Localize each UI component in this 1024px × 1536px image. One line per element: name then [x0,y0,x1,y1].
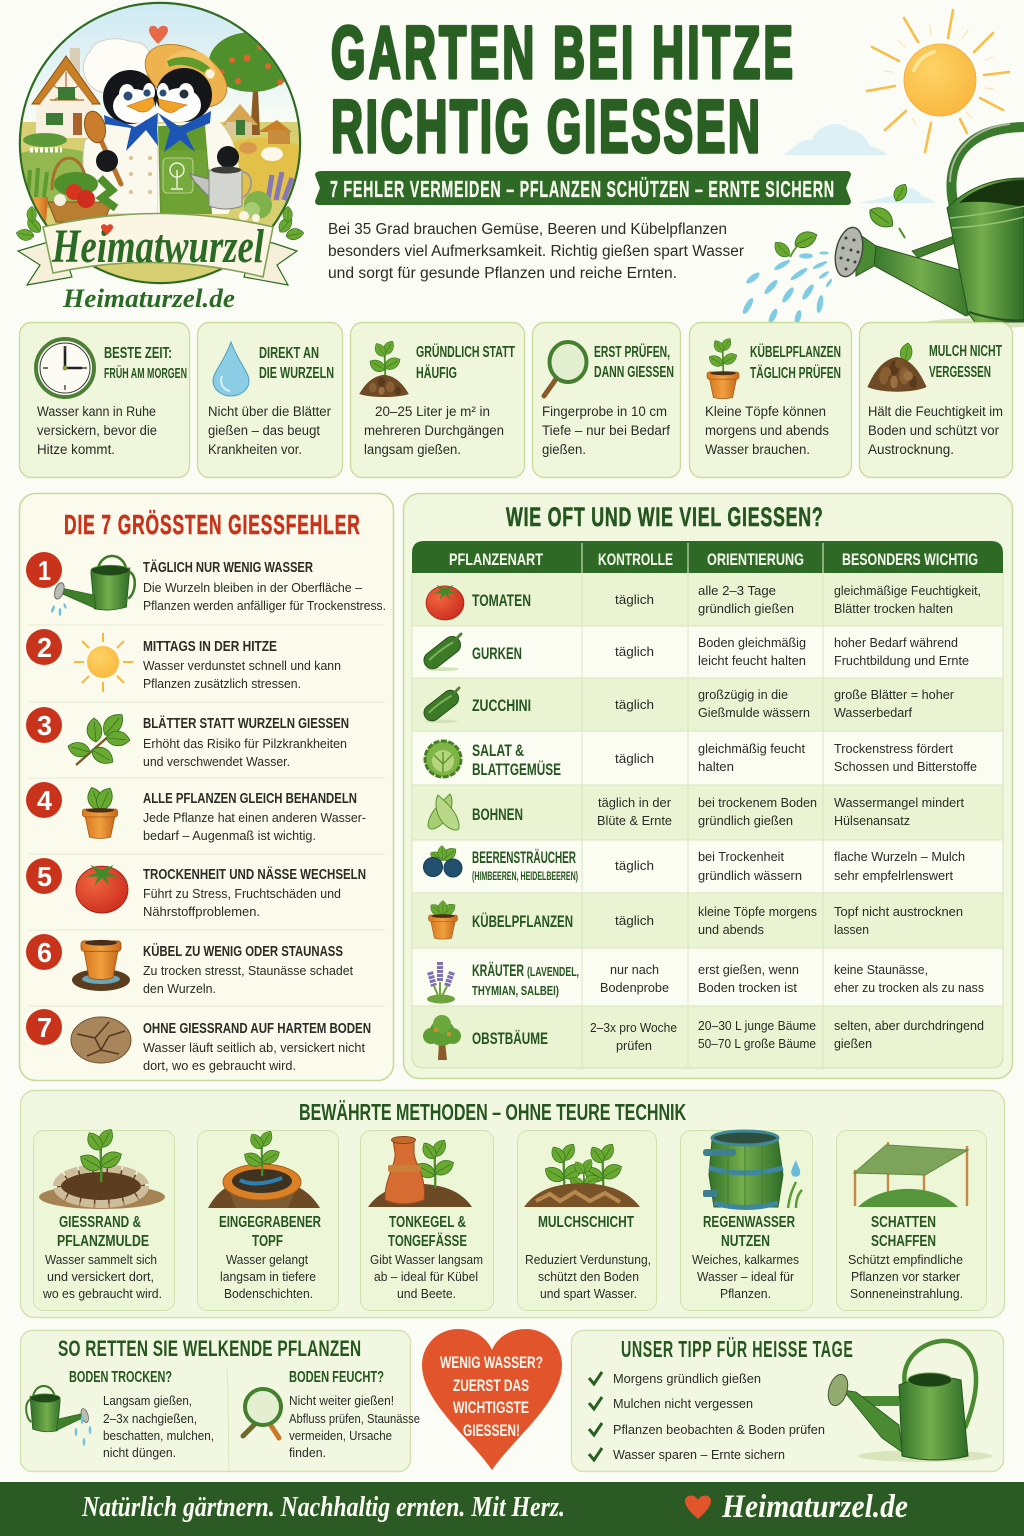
method: Gießrand: wo es gebraucht wird. [42,1287,162,1301]
checklist: Wasser sparen – Ernte sichern [613,1447,785,1462]
row: Salat und Blattgemüse: gleichmäßig feucht [698,741,805,756]
checklist: Morgens gründlich gießen [613,1371,761,1386]
card text: Fingerprobe in 10 cm [542,404,667,419]
card text: langsam gießen. [364,442,461,457]
row: Beerensträucher: bei Trockenheit [698,849,784,864]
row: Tomaten: Blätter trocken halten [834,601,953,616]
card text: Wasser kann in Ruhe [37,404,156,419]
row: Kräuter [427,961,984,1004]
icon: mulch pile [867,342,927,392]
item 7: Wasser läuft seitlich ab, versickert nicht [143,1041,366,1055]
row: Kübelpflanzen: täglich [615,913,654,928]
heading: UNSER TIPP FÜR HEISSE TAGE [621,1338,853,1363]
method: Eingegrabener Topf: EINGEGRABENER [219,1214,321,1231]
item 5: Führt zu Stress, Fruchtschäden und [143,887,341,901]
item 5: 5 [37,861,52,892]
row: Beerensträucher: täglich [615,858,654,873]
row: Obstbäume: 50–70 L große Bäume [698,1036,816,1051]
method: Gießrand: PFLANZMULDE [57,1233,149,1250]
method: Mulchschicht: und spart Wasser. [540,1287,637,1301]
item 4 [26,782,366,843]
icon: potted plant [707,336,739,399]
column: Boden trocken: beschatten, mulchen, [103,1429,214,1443]
item 4: Jede Pflanze hat einen anderen Wasser- [143,811,366,825]
icon: large watering can [831,124,1024,328]
icon: seedling on soil [359,339,409,397]
method: Mulchschicht: schützt den Boden [538,1270,639,1284]
item 2: Pflanzen zusätzlich stressen. [143,677,301,691]
method: Gießrand [34,1126,174,1310]
ribbon banner with brand name [18,214,297,285]
item 5: Nährstoffproblemen. [143,905,260,919]
card text: Nicht über die Blätter [208,404,331,419]
method: Gießrand: und versickert dort, [47,1270,154,1284]
row: Obstbäume: gießen [834,1036,872,1051]
method: Schatten: Sonneneinstrahlung. [850,1287,963,1301]
panel: Kübelpflanzen täglich prüfen [690,322,852,478]
row: Kräuter: KRÄUTER [472,961,524,980]
table header: BESONDERS WICHTIG [842,550,978,569]
callout: heart: WENIG WASSER? [440,1354,543,1372]
method: Regenwasser: REGENWASSER [703,1214,795,1231]
title: GARTEN BEI HITZE [331,11,793,94]
item 4: 4 [37,785,52,816]
table [412,541,1003,1068]
icon: floating leaves [771,181,910,260]
item 7: OHNE GIESSRAND AUF HARTEM BODEN [143,1021,371,1037]
item 3: und verschwendet Wasser. [143,755,290,769]
card text [208,404,331,457]
item 1 [26,552,386,616]
card text [364,404,504,457]
panel: Mulch nicht vergessen [860,322,1012,478]
callout: heart: GIESSEN! [463,1422,520,1440]
illustration: half-timbered house [23,48,100,150]
checklist: Pflanzen beobachten & Boden prüfen [613,1422,825,1437]
row: Tomaten: TOMATEN [472,591,531,610]
row: Bohnen: Blüte & Ernte [597,813,672,828]
checklist [589,1371,825,1462]
item 6: den Wurzeln. [143,982,216,996]
column: Boden feucht: BODEN FEUCHT? [289,1369,384,1386]
heading: BEWÄHRTE METHODEN – OHNE TEURE TECHNIK [299,1099,687,1126]
method: Regenwasser: NUTZEN [721,1233,770,1250]
method: Schatten: SCHAFFEN [871,1233,936,1250]
row: Obstbäume: OBSTBÄUME [472,1029,548,1048]
footer bar: Natürlich gärtnern. Nachhaltig ernten. Mit Herz. [81,1491,565,1523]
row: Tomaten: gleichmäßige Feuchtigkeit, [834,583,981,598]
row: Kübelpflanzen: Topf nicht austrocknen [834,904,963,919]
icon: heart above penguins [149,26,168,44]
card text: gießen. [542,442,586,457]
banner: subtitle: 7 FEHLER VERMEIDEN – PFLANZEN SCHÜTZEN – ERNTE SICHERN [330,178,834,203]
item 1: Die Wurzeln bleiben in der Oberfläche – [143,581,362,595]
title: RICHTIG GIESSEN [331,85,760,168]
column: Boden feucht: finden. [289,1446,326,1460]
row: Beerensträucher: sehr empfelrlenswert [834,868,953,883]
icon: magnifying glass [544,342,586,396]
row: Zucchini: Wasserbedarf [834,705,912,720]
row: Gurken [421,633,969,672]
method: Tonkegel: Gibt Wasser langsam [370,1253,483,1267]
callout: heart: WICHTIGSTE [453,1399,529,1417]
title [331,11,793,168]
row: Bohnen: täglich in der [598,795,672,810]
row: Kräuter: erst gießen, wenn [698,962,799,977]
callout: heart: ZUERST DAS [453,1377,529,1395]
method: Tonkegel: TONGEFÄSSE [388,1232,467,1250]
illustration: vegetable basket and herbs [27,156,118,222]
row: Gurken: täglich [615,644,654,659]
item 5 [26,858,366,919]
method: Mulchschicht [518,1130,656,1310]
method: Eingegrabener Topf: Wasser gelangt [226,1253,308,1267]
row: Kräuter: nur nach [610,962,659,977]
row: Kräuter: (LAVENDEL, [527,965,579,979]
logo: Heimatwurzel penguin gardeners badge [16,2,304,308]
row: Kübelpflanzen: kleine Töpfe morgens [698,904,817,919]
item 5: TROCKENHEIT UND NÄSSE WECHSELN [143,866,366,883]
row: Bohnen: Wassermangel mindert [834,795,964,810]
item 7: dort, wo es gebraucht wird. [143,1059,296,1073]
row: Bohnen: gründlich gießen [698,813,793,828]
card heading [929,343,1002,381]
column: Boden trocken [26,1369,214,1460]
table header: ORIENTIERUNG [707,550,804,569]
row: Beerensträucher: (HIMBEEREN, HEIDELBEEREN) [472,871,578,883]
card text [868,404,1003,457]
item 4: ALLE PFLANZEN GLEICH BEHANDELN [143,791,357,807]
icon: watering can [825,1341,992,1462]
row: Beerensträucher [424,845,965,883]
panel: Unser Tipp für heiße Tage [572,1330,1004,1472]
row: Salat und Blattgemüse: BLATTGEMÜSE [472,760,561,779]
row: Zucchini: große Blätter = hoher [834,687,955,702]
ribbon banner with brand name: Heimatwurzel [51,220,265,273]
item 7: 7 [37,1012,52,1043]
method: Gießrand: Wasser sammelt sich [45,1253,157,1267]
column: Boden trocken: Langsam gießen, [103,1394,192,1408]
icon: water drop [213,342,249,396]
card heading: BESTE ZEIT: [104,345,172,362]
row: Salat und Blattgemüse: Schossen und Bitterstoffe [834,759,977,774]
row: Salat und Blattgemüse: täglich [615,751,654,766]
row: Obstbäume [423,1015,984,1060]
card text: 20–25 Liter je m² in [375,404,490,419]
row: Salat und Blattgemüse: Trockenstress fördert [834,741,953,756]
illustration: apple tree and barn [209,32,295,161]
card heading [259,345,334,382]
row: Tomaten: täglich [615,592,654,607]
card text [37,404,157,457]
laurel leaves [15,206,305,242]
method: Schatten: SCHATTEN [871,1214,936,1231]
card text [542,404,670,457]
card heading [750,342,841,382]
illustration: lavender and cabbage [239,172,292,222]
card text: Wasser brauchen. [705,442,810,457]
row: Gurken: hoher Bedarf während [834,635,958,650]
card text: Boden und schützt vor [868,423,999,438]
row: Beerensträucher: flache Wurzeln – Mulch [834,849,965,864]
card heading: FRÜH AM MORGEN [104,365,187,382]
method: Mulchschicht: Reduziert Verdunstung, [525,1253,651,1267]
method: Schatten: Pflanzen vor starker [851,1270,960,1284]
item 6: 6 [37,937,52,968]
card text: Hitze kommt. [37,442,115,457]
item 1: Pflanzen werden anfälliger für Trockenstress. [143,599,386,613]
intro text [328,221,744,282]
row: Salat und Blattgemüse: halten [698,759,734,774]
icon: sun [867,10,1009,152]
panel: Wie oft und wie viel gießen [404,494,1012,1078]
item 6 [26,934,354,996]
method: Tonkegel: und Beete. [397,1287,456,1301]
card heading: HÄUFIG [416,364,457,382]
panel: Erst prüfen, dann gießen [532,322,680,478]
item 4: bedarf – Augenmaß ist wichtig. [143,829,316,843]
table header: KONTROLLE [598,550,673,569]
row: Tomaten: alle 2–3 Tage [698,583,776,598]
card text [705,404,829,457]
row: Tomaten: gründlich gießen [698,601,794,616]
method: Regenwasser: Wasser – ideal für [697,1270,794,1284]
item 6: Zu trocken stresst, Staunässe schadet [143,964,354,978]
item 3: BLÄTTER STATT WURZELN GIESSEN [143,715,349,732]
method: Tonkegel: TONKEGEL & [389,1214,466,1231]
card heading: DIE WURZELN [259,365,334,382]
method: Gießrand: GIESSRAND & [59,1214,141,1231]
row: Gurken: Fruchtbildung und Ernte [834,653,969,668]
method: Tonkegel [360,1130,494,1310]
card heading [104,345,187,382]
card text: versickern, bevor die [37,423,157,438]
card heading [416,342,515,382]
icon: water spray drops [741,252,833,325]
heading: SO RETTEN SIE WELKENDE PFLANZEN [58,1337,361,1362]
row: Bohnen: BOHNEN [472,805,523,824]
panel: Bewährte Methoden [20,1090,1004,1318]
row: Obstbäume: 2–3x pro Woche [590,1020,677,1035]
column: Boden trocken: 2–3x nachgießen, [103,1412,197,1426]
column: Boden trocken: nicht düngen. [103,1446,176,1460]
panel: Direkt an die Wurzeln [198,322,342,478]
icon: heart [685,1496,711,1519]
intro text: besonders viel Aufmerksamkeit. Richtig gießen spart Wasser [328,243,744,260]
row: Bohnen: bei trockenem Boden [698,795,817,810]
card text: gießen – das beugt [208,423,320,438]
item 2: 2 [37,632,52,663]
row: Obstbäume: prüfen [616,1038,652,1053]
row: Kübelpflanzen: lassen [834,922,869,937]
card heading: ERST PRÜFEN, [594,342,670,361]
card text: Hält die Feuchtigkeit im [868,404,1003,419]
item 6: KÜBEL ZU WENIG ODER STAUNASS [143,943,343,960]
row: Zucchini: großzügig in die [698,687,788,702]
illustration: gardener penguin with straw hat [144,44,252,214]
footer bar: Heimaturzel.de [721,1489,908,1525]
item 1: 1 [38,555,51,586]
row: Kübelpflanzen: KÜBELPFLANZEN [472,912,573,931]
method: Mulchschicht: MULCHSCHICHT [538,1214,634,1231]
card text: mehreren Durchgängen [364,423,504,438]
row: Bohnen [428,794,964,830]
card heading: GRÜNDLICH STATT [416,342,515,361]
heading: DIE 7 GRÖSSTEN GIESSFEHLER [64,509,360,540]
row: Beerensträucher: BEERENSTRÄUCHER [472,848,576,867]
heading: WIE OFT UND WIE VIEL GIESSEN? [506,501,823,532]
row: Kräuter: Bodenprobe [600,980,669,995]
card text: Krankheiten vor. [208,442,302,457]
card text: Austrocknung. [868,442,954,457]
column: Boden feucht [243,1369,420,1460]
column: Boden feucht: Nicht weiter gießen! [289,1394,394,1408]
card text: Kleine Töpfe können [705,404,826,419]
row: Salat und Blattgemüse [425,741,977,779]
row: Beerensträucher: gründlich wässern [698,868,802,883]
row: Obstbäume: 20–30 L junge Bäume [698,1018,816,1033]
card text: Tiefe – nur bei Bedarf [542,423,670,438]
row: Kräuter: THYMIAN, SALBEI) [472,983,559,998]
row: Zucchini: Gießmulde wässern [698,705,810,720]
row: Obstbäume: selten, aber durchdringend [834,1018,984,1033]
column: Boden trocken: BODEN TROCKEN? [69,1369,172,1386]
method: Regenwasser: Pflanzen. [720,1287,771,1301]
method: Eingegrabener Topf [198,1128,338,1310]
row: Gurken: GURKEN [472,644,522,663]
row: Gurken: Boden gleichmäßig [698,635,806,650]
card heading: DANN GIESSEN [594,364,674,381]
checklist: Mulchen nicht vergessen [613,1396,753,1411]
callout: heart [422,1329,562,1470]
panel: Beste Zeit [20,322,190,478]
row: Gurken: leicht feucht halten [698,653,806,668]
column: Boden feucht: Abfluss prüfen, Staunässe [289,1412,420,1426]
method: Schatten [836,1130,986,1310]
card heading: TÄGLICH PRÜFEN [750,363,841,382]
footer bar [0,1482,1024,1536]
panel: So retten Sie welkende Pflanzen [20,1330,420,1472]
item 1: TÄGLICH NUR WENIG WASSER [143,559,313,576]
card heading: DIREKT AN [259,345,319,362]
banner: subtitle [315,171,851,205]
method: Regenwasser: Weiches, kalkarmes [692,1253,799,1267]
table header: PFLANZENART [449,550,543,569]
item 3: 3 [37,710,52,741]
method: Eingegrabener Topf: Bodenschichten. [224,1287,313,1301]
icon: clock [36,339,94,397]
method: Eingegrabener Topf: TOPF [252,1233,283,1250]
row: Kräuter: keine Staunässe, [834,962,928,977]
row: Zucchini: täglich [615,697,654,712]
row: Salat und Blattgemüse: SALAT & [472,741,524,760]
illustration: chef penguin [81,39,158,214]
row: Tomaten [426,583,981,620]
item 7 [26,1009,371,1073]
row: Kübelpflanzen [428,901,963,939]
row: Bohnen: Hülsenansatz [834,813,910,828]
row: Kübelpflanzen: und abends [698,922,764,937]
table header [412,541,1003,573]
row: Zucchini: ZUCCHINI [472,696,531,715]
item 3 [26,707,349,769]
column: Boden feucht: vermeiden, Ursache [289,1429,392,1443]
method: Eingegrabener Topf: langsam in tiefere [220,1270,316,1284]
intro text: Bei 35 Grad brauchen Gemüse, Beeren und Kübelpflanzen [328,221,727,238]
card heading: KÜBELPFLANZEN [750,342,841,361]
row: Kräuter: eher zu trocken als zu nass [834,980,984,995]
method: Tonkegel: ab – ideal für Kübel [374,1270,478,1284]
item 2: Wasser verdunstet schnell und kann [143,659,341,673]
clouds [783,124,936,203]
card heading [594,342,674,381]
row: Zucchini [421,687,955,724]
item 3: Erhöht das Risiko für Pilzkrankheiten [143,737,347,751]
panel: Gründlich statt häufig [350,322,524,478]
card text: morgens und abends [705,423,829,438]
item 2: MITTAGS IN DER HITZE [143,639,277,655]
method: Regenwasser [680,1130,812,1310]
panel: Die 7 größten Gießfehler [20,494,394,1080]
method: Schatten: Schützt empfindliche [848,1253,963,1267]
item 2 [26,629,341,692]
row: Kräuter: Boden trocken ist [698,980,797,995]
brand URL under logo: Heimaturzel.de [62,284,235,313]
intro text: und sorgt für gesunde Pflanzen und reiche Ernten. [328,265,677,282]
